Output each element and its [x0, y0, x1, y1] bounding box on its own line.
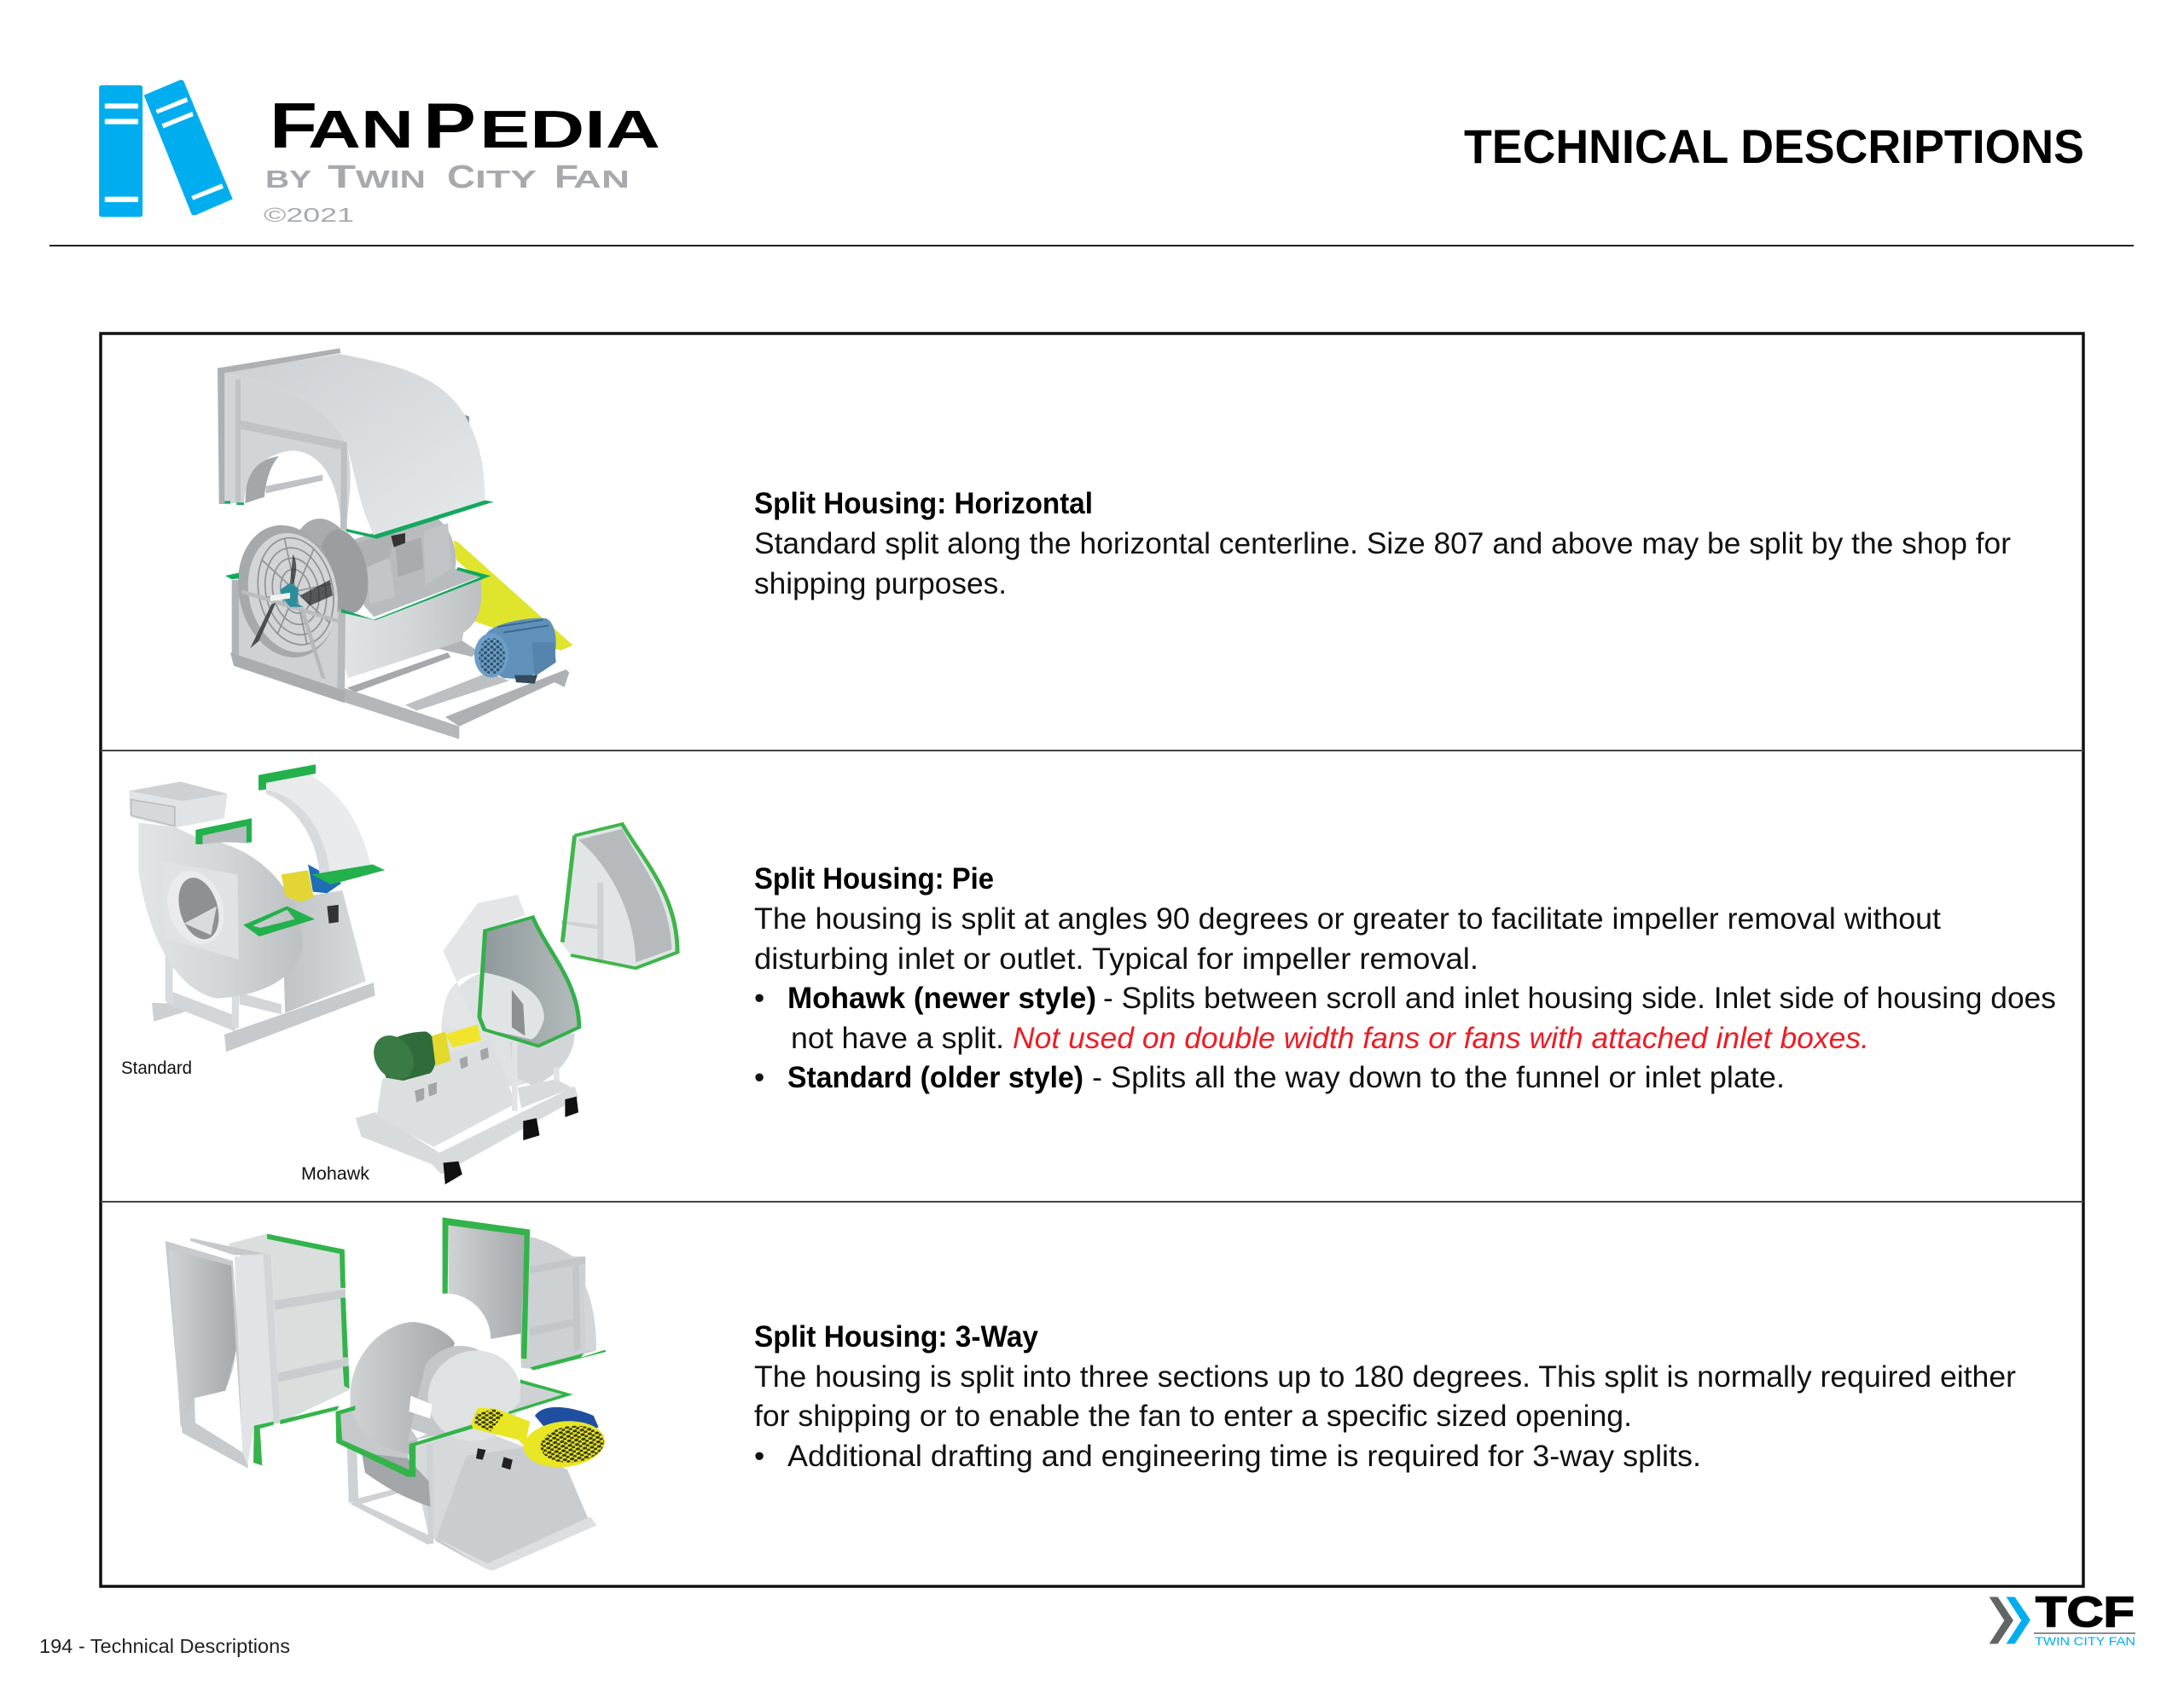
- text: pie: •: [754, 1061, 764, 1094]
- wordmark FanPedia: [270, 90, 660, 161]
- tagline by Twin City Fan: F: [555, 159, 578, 195]
- wordmark FanPedia: AN: [308, 101, 414, 159]
- text: 3-way: •: [754, 1440, 764, 1473]
- tagline by Twin City Fan: BY: [265, 166, 311, 194]
- text: 3-way: [754, 1320, 2016, 1473]
- text: 3-way: The housing is split into three sections up to 180 degrees. This split is normally required either: [754, 1360, 2016, 1394]
- text: pie: Mohawk (newer style): [787, 982, 1096, 1015]
- copyright: ©2021: [264, 204, 354, 226]
- text: horizontal: Split Housing: Horizontal: [754, 487, 1093, 520]
- text: 3-way: Split Housing: 3-Way: [754, 1320, 1039, 1354]
- image: 3-way split fan: [166, 1217, 608, 1571]
- text: 3-way: for shipping or to enable the fan to enter a specific sized opening.: [754, 1400, 1632, 1433]
- tagline by Twin City Fan: WIN: [356, 166, 426, 194]
- text: horizontal: shipping purposes.: [754, 567, 1007, 600]
- right housing section: [443, 1217, 606, 1371]
- tagline by Twin City Fan: AN: [573, 166, 630, 194]
- detached mohawk pie: [561, 824, 677, 968]
- panel: split housing 3-way: [166, 1217, 2016, 1571]
- icon: chevrons: [1989, 1597, 2030, 1644]
- wordmark FanPedia: F: [270, 90, 317, 161]
- tagline by Twin City Fan: T: [328, 159, 356, 195]
- text: pie: disturbing inlet or outlet. Typical for impeller removal.: [754, 942, 1478, 976]
- text: horizontal: Standard split along the horizontal centerline. Size 807 and above may be split by the shop for: [754, 527, 2011, 560]
- text: pie: Not used on double width fans or fans with attached inlet boxes.: [1013, 1022, 1869, 1055]
- footer page label: 194 - Technical Descriptions: [39, 1635, 290, 1657]
- standard fan: [129, 764, 385, 1052]
- tagline by Twin City Fan: ITY: [475, 166, 537, 194]
- tagline by Twin City Fan: [265, 159, 630, 195]
- tagline by Twin City Fan: C: [447, 159, 475, 195]
- footer logo TCF: TCF: [2036, 1588, 2135, 1636]
- text: pie: [754, 862, 2056, 1094]
- header: logo FanPedia: [99, 79, 660, 226]
- image: standard and mohawk pie split fans: [129, 764, 677, 1185]
- table frame: [101, 333, 2083, 1586]
- motor and guard: [471, 1407, 608, 1472]
- text: pie: not have a split.: [791, 1022, 1004, 1055]
- image: horizontal split fan: [218, 348, 573, 739]
- panel: split housing pie: [121, 764, 2056, 1185]
- wordmark FanPedia: EDIA: [479, 101, 660, 159]
- footer logo TCF: [1989, 1588, 2135, 1648]
- text: pie: Split Housing: Pie: [754, 862, 994, 896]
- text: pie: The housing is split at angles 90 degrees or greater to facilitate impeller removal without: [754, 902, 1941, 936]
- title: TECHNICAL DESCRIPTIONS: [1464, 119, 2084, 173]
- label: Standard: Standard: [121, 1058, 192, 1078]
- lower housing and impeller: [335, 1322, 597, 1571]
- text: pie: - Splits all the way down to the funnel or inlet plate.: [1092, 1061, 1785, 1094]
- text: pie: - Splits between scroll and inlet housing side. Inlet side of housing does: [1103, 982, 2056, 1015]
- mohawk fan: [356, 895, 579, 1185]
- wordmark FanPedia: P: [423, 90, 476, 161]
- text: horizontal: [754, 487, 2011, 600]
- icon: blue books: [99, 79, 233, 217]
- left housing section: [166, 1234, 350, 1469]
- panel: split housing horizontal: [218, 348, 2011, 739]
- text: pie: Standard (older style): [787, 1061, 1083, 1094]
- text: pie: •: [754, 982, 764, 1015]
- footer logo TCF: TWIN CITY FAN: [2035, 1634, 2135, 1648]
- inlet plate: [233, 583, 344, 699]
- text: 3-way: Additional drafting and engineering time is required for 3-way splits.: [787, 1440, 1701, 1473]
- label: Mohawk: Mohawk: [301, 1164, 370, 1184]
